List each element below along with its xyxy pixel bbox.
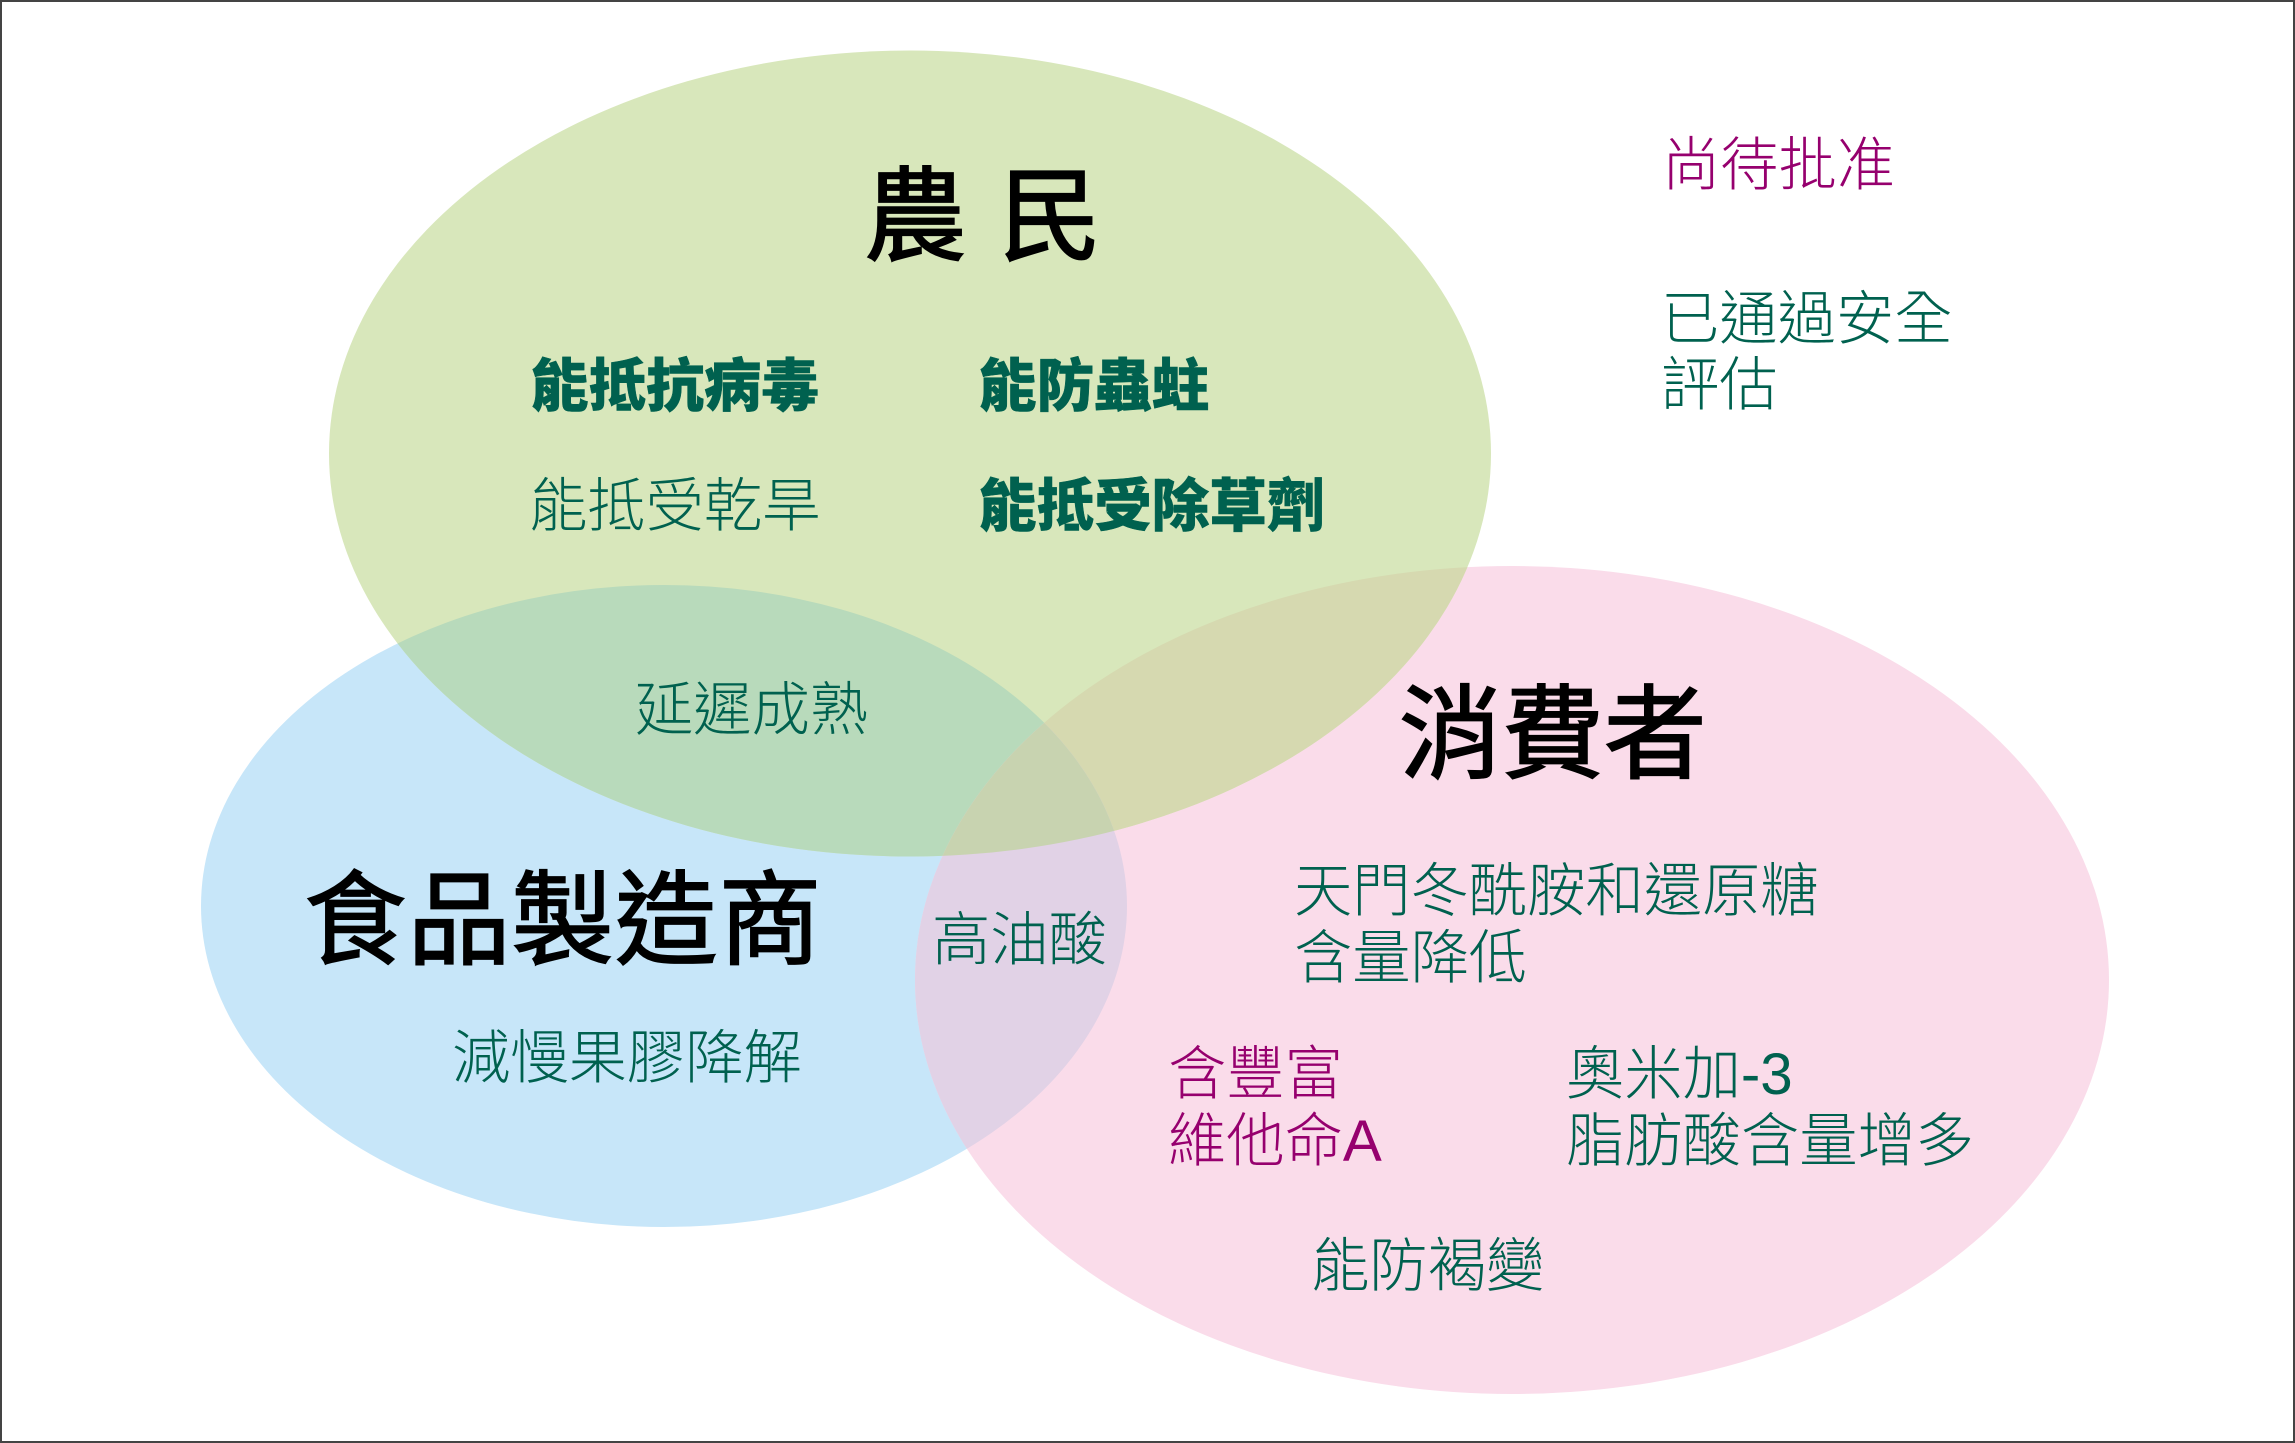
trait: rich in vitamin A: 維他命A bbox=[1168, 1109, 1382, 1174]
heading: farmers: 農 bbox=[864, 159, 966, 274]
trait: herbicide tolerance: 能抵受除草劑 bbox=[979, 475, 1325, 539]
legend: pending approval: 尚待批准 bbox=[1662, 133, 1895, 198]
overlap: manufacturers and consumers bbox=[915, 723, 1127, 1148]
trait: rich in vitamin A: 含豐富 bbox=[1168, 1042, 1343, 1107]
trait: slower pectin degradation: 減慢果膠降解 bbox=[452, 1026, 802, 1091]
trait: prevents browning: 能防褐變 bbox=[1311, 1234, 1544, 1299]
heading: food manufacturers: 食品製造商 bbox=[304, 863, 822, 978]
ellipse: consumers bbox=[915, 566, 2109, 1394]
trait: virus resistance: 能抵抗病毒 bbox=[531, 355, 819, 419]
legend: passed safety assessment: 評估 bbox=[1661, 353, 1778, 418]
trait: more omega-3 fatty acids: 奧米加-3 bbox=[1566, 1042, 1793, 1107]
legend bbox=[1661, 133, 1952, 418]
panel: consumer traits bbox=[1168, 859, 1974, 1299]
legend: passed safety assessment: 已通過安全 bbox=[1661, 287, 1952, 352]
ellipse: food manufacturers bbox=[201, 585, 1127, 1227]
panel: farmer traits bbox=[529, 355, 1325, 539]
trait: high oleic acid: 高油酸 bbox=[932, 908, 1107, 973]
heading: consumers: 消費者 bbox=[1399, 677, 1706, 792]
trait: lower asparagine and reducing sugars: 天門冬酰胺和還原糖 bbox=[1294, 859, 1819, 924]
overlap: farmers and consumers bbox=[1044, 567, 1468, 831]
trait: insect resistance: 能防蟲蛀 bbox=[979, 355, 1209, 419]
trait: more omega-3 fatty acids: 脂肪酸含量增多 bbox=[1566, 1109, 1974, 1174]
overlap: farmers and manufacturers bbox=[398, 585, 1044, 856]
venn diagram bbox=[201, 50, 2109, 1394]
ellipse: farmers bbox=[329, 50, 1491, 856]
heading: farmers: 民 bbox=[999, 159, 1102, 274]
trait: drought tolerance: 能抵受乾旱 bbox=[529, 474, 820, 539]
trait: delayed ripening: 延遲成熟 bbox=[635, 678, 868, 743]
trait: lower asparagine and reducing sugars: 含量降低 bbox=[1294, 926, 1527, 991]
overlap: all three bbox=[942, 723, 1114, 856]
